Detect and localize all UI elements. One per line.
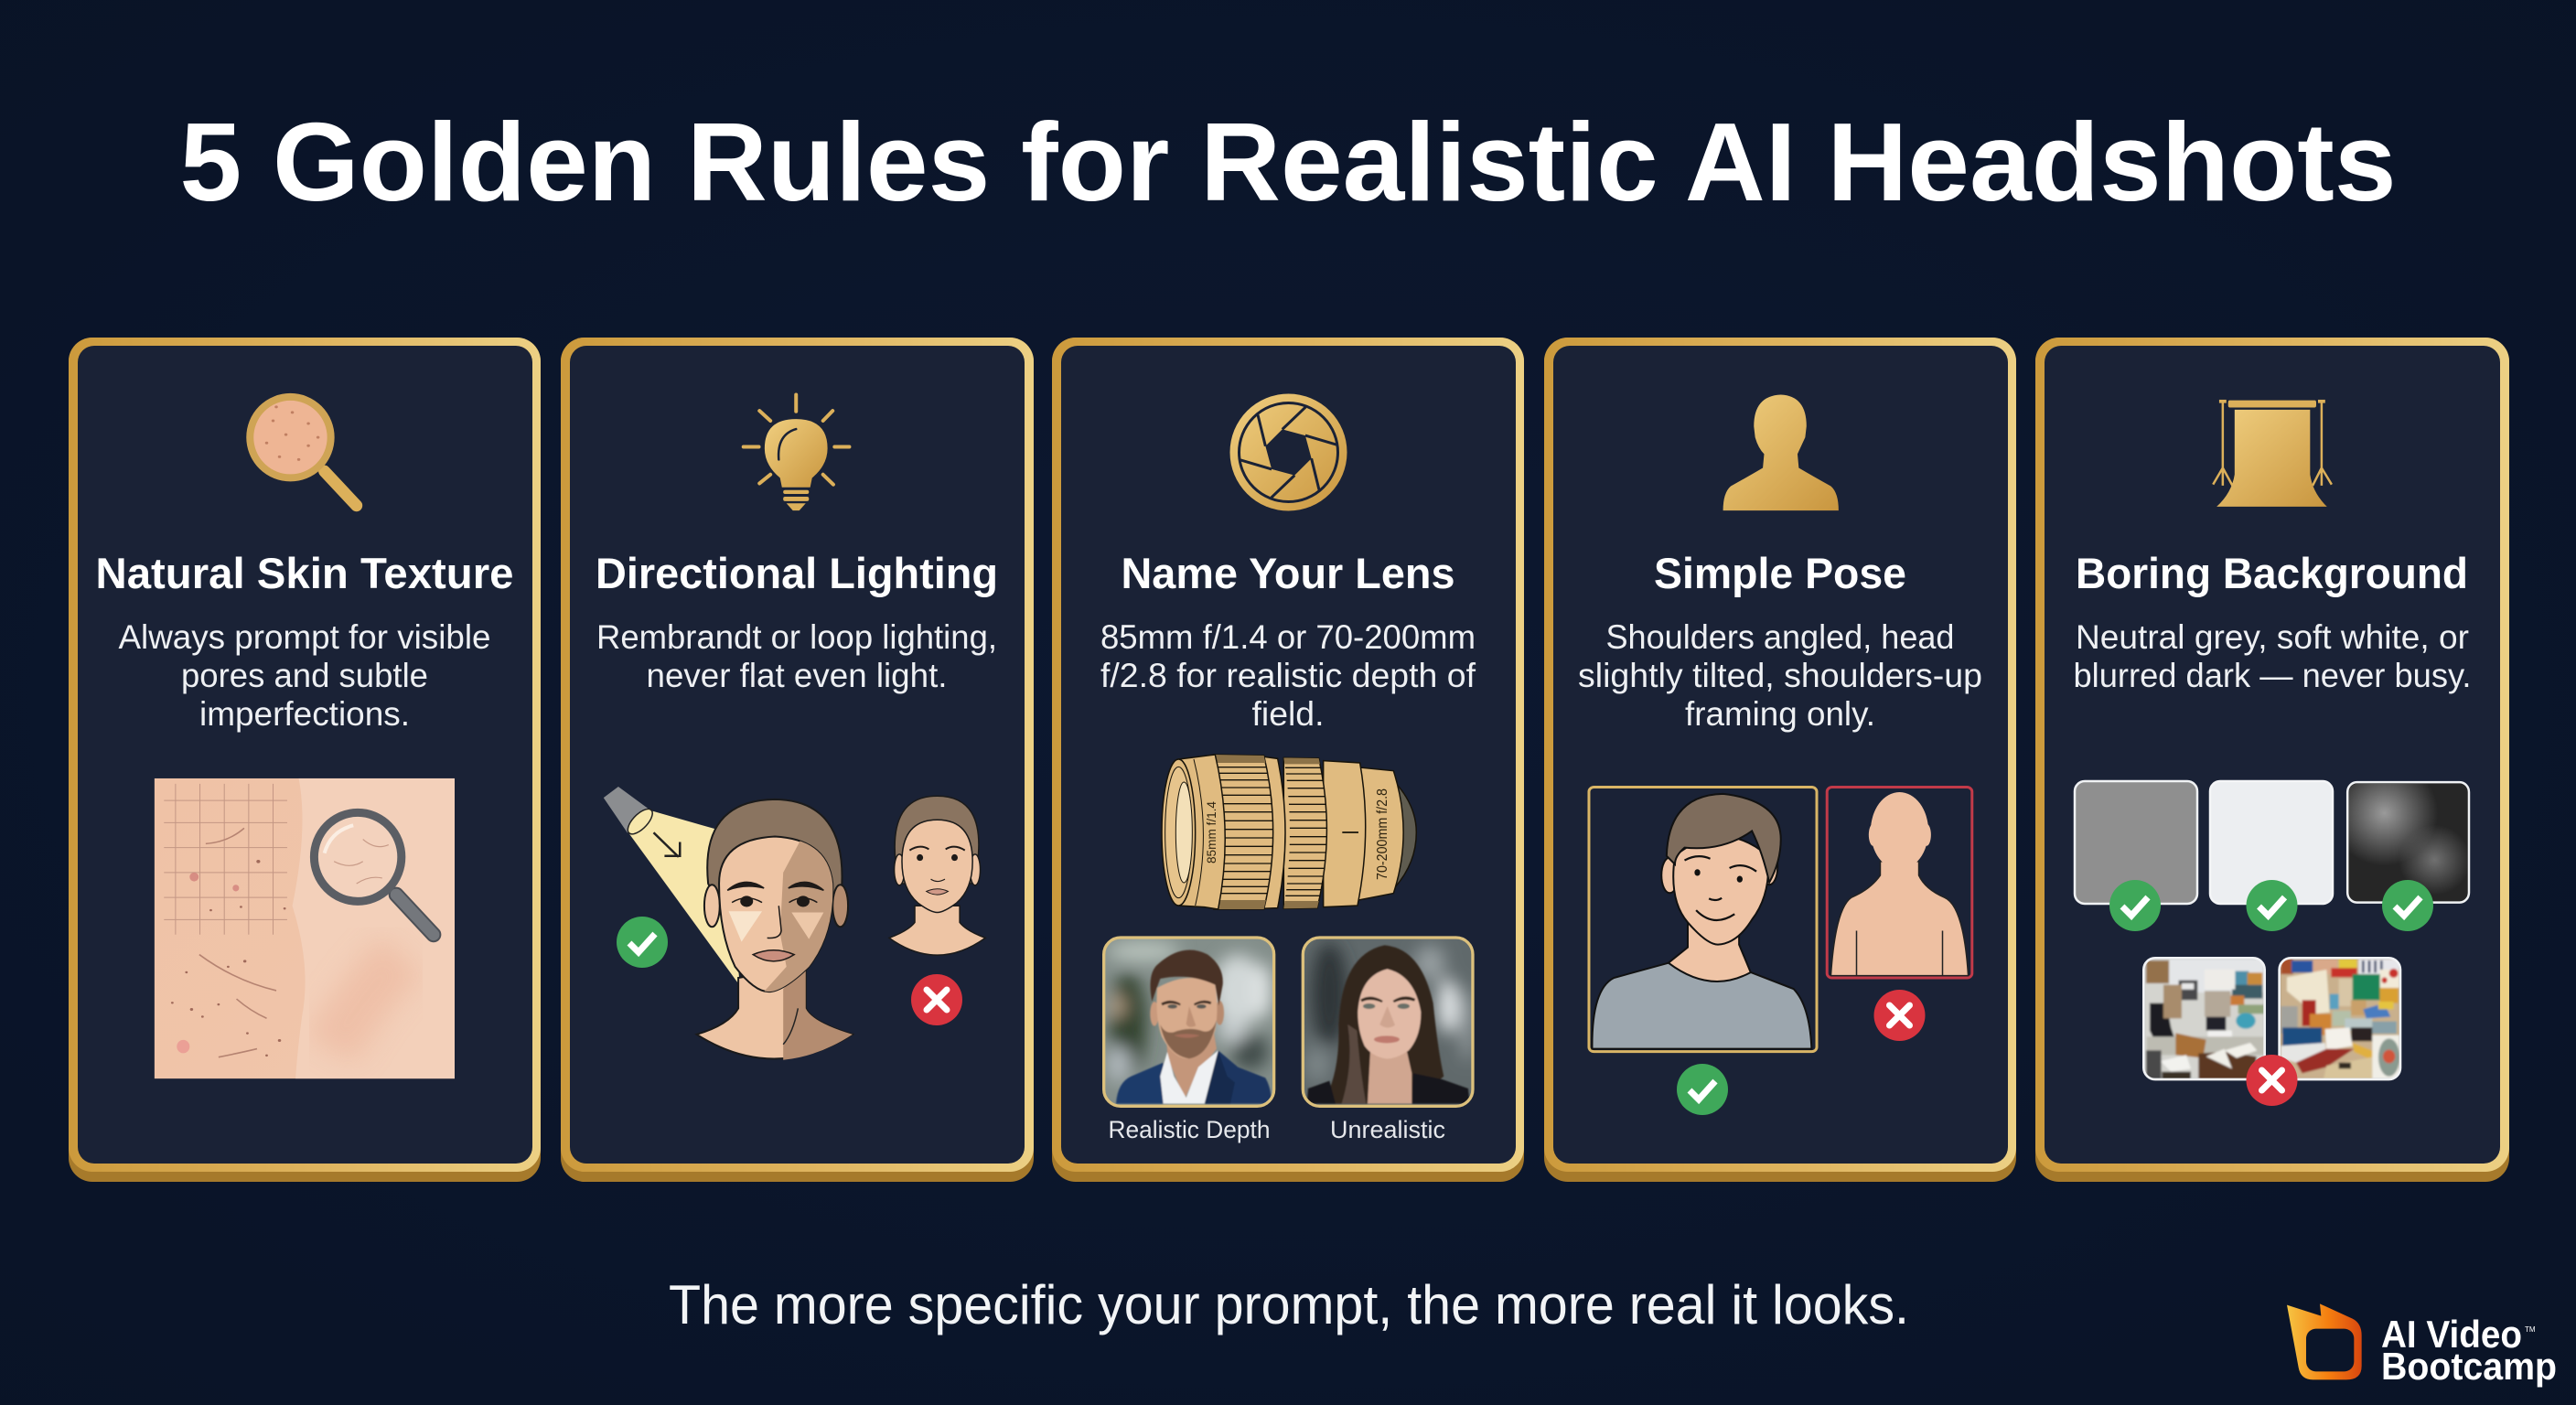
description — [596, 618, 997, 694]
icon: green check — [2109, 880, 2161, 931]
description — [1578, 618, 1982, 733]
card frame — [69, 338, 541, 1182]
logo: AI Video Bootcamp — [2287, 1303, 2557, 1388]
description: 85mm f/1.4 or 70-200mm — [1100, 618, 1476, 656]
swatch: busy clutter — [2280, 958, 2400, 1079]
logo wordmark: TM — [2525, 1325, 2536, 1334]
panel: boring background — [2035, 338, 2509, 1182]
logo mark — [2287, 1303, 2362, 1379]
description: slightly tilted, shoulders-up — [1578, 657, 1982, 694]
logo wordmark — [2381, 1313, 2557, 1388]
icon: red cross — [1873, 990, 1925, 1041]
description: pores and subtle — [181, 657, 428, 694]
description: Rembrandt or loop lighting, — [596, 618, 997, 656]
icon: green check — [617, 917, 668, 968]
heading: Directional Lighting — [596, 549, 998, 597]
illustration: golden lens — [1162, 753, 1416, 910]
logo wordmark: AI Video — [2381, 1313, 2522, 1356]
icon: magnifying glass on skin — [250, 397, 357, 506]
description: never flat even light. — [646, 657, 948, 694]
photo: realistic depth portrait — [1104, 938, 1274, 1106]
card frame — [1052, 338, 1524, 1182]
panel: natural skin texture — [69, 338, 541, 1182]
heading: Name Your Lens — [1122, 549, 1454, 597]
illustration: skin close-up with magnifier — [155, 778, 455, 1078]
heading: Boring Background — [2076, 549, 2468, 597]
description — [119, 618, 490, 733]
icon: red cross — [2247, 1055, 2298, 1106]
title: 5 Golden Rules for Realistic AI Headshots — [179, 100, 2397, 224]
panel: name your lens — [1052, 338, 1524, 1182]
caption: realistic depth: Realistic Depth — [1109, 1116, 1270, 1143]
logo wordmark: Bootcamp — [2381, 1345, 2557, 1388]
swatch: neutral grey — [2075, 781, 2197, 904]
description: imperfections. — [199, 695, 410, 733]
illustration: golden lens: 70-200mm f/2.8 — [1375, 788, 1390, 880]
swatch: soft white — [2210, 781, 2333, 904]
description: blurred dark — never busy. — [2073, 657, 2472, 694]
swatch: busy office — [2143, 958, 2266, 1079]
swatch: blurred dark — [2347, 782, 2469, 903]
card frame — [1544, 338, 2016, 1182]
photo: unrealistic portrait — [1303, 938, 1473, 1106]
description: Always prompt for visible — [119, 618, 490, 656]
footer tagline: The more specific your prompt, the more real it looks. — [669, 1274, 1909, 1335]
card frame — [561, 338, 1034, 1182]
panel: simple pose — [1544, 338, 2016, 1182]
icon: studio backdrop — [2213, 400, 2332, 507]
description: field. — [1251, 695, 1325, 733]
description — [1100, 618, 1476, 733]
illustration: incorrect pose — [1827, 788, 1972, 978]
illustration: golden lens: 85mm f/1.4 — [1204, 801, 1218, 863]
description: framing only. — [1685, 695, 1875, 733]
illustration: lit face with spotlight — [604, 787, 985, 1060]
description: Shoulders angled, head — [1606, 618, 1954, 656]
icon: person bust — [1723, 395, 1839, 510]
icon: green check — [1677, 1064, 1728, 1115]
icon: light bulb — [744, 395, 849, 510]
card frame — [2035, 338, 2509, 1182]
description: Neutral grey, soft white, or — [2076, 618, 2469, 656]
icon: red cross — [911, 974, 962, 1025]
panel: directional lighting — [561, 338, 1034, 1182]
heading: Simple Pose — [1654, 549, 1906, 597]
illustration: correct pose — [1589, 788, 1817, 1052]
description — [2073, 618, 2472, 694]
description: f/2.8 for realistic depth of — [1100, 657, 1476, 694]
icon: green check — [2247, 880, 2298, 931]
icon: green check — [2382, 880, 2433, 931]
caption: unrealistic: Unrealistic — [1330, 1116, 1445, 1143]
heading: Natural Skin Texture — [95, 549, 514, 597]
icon: aperture — [1229, 393, 1347, 510]
